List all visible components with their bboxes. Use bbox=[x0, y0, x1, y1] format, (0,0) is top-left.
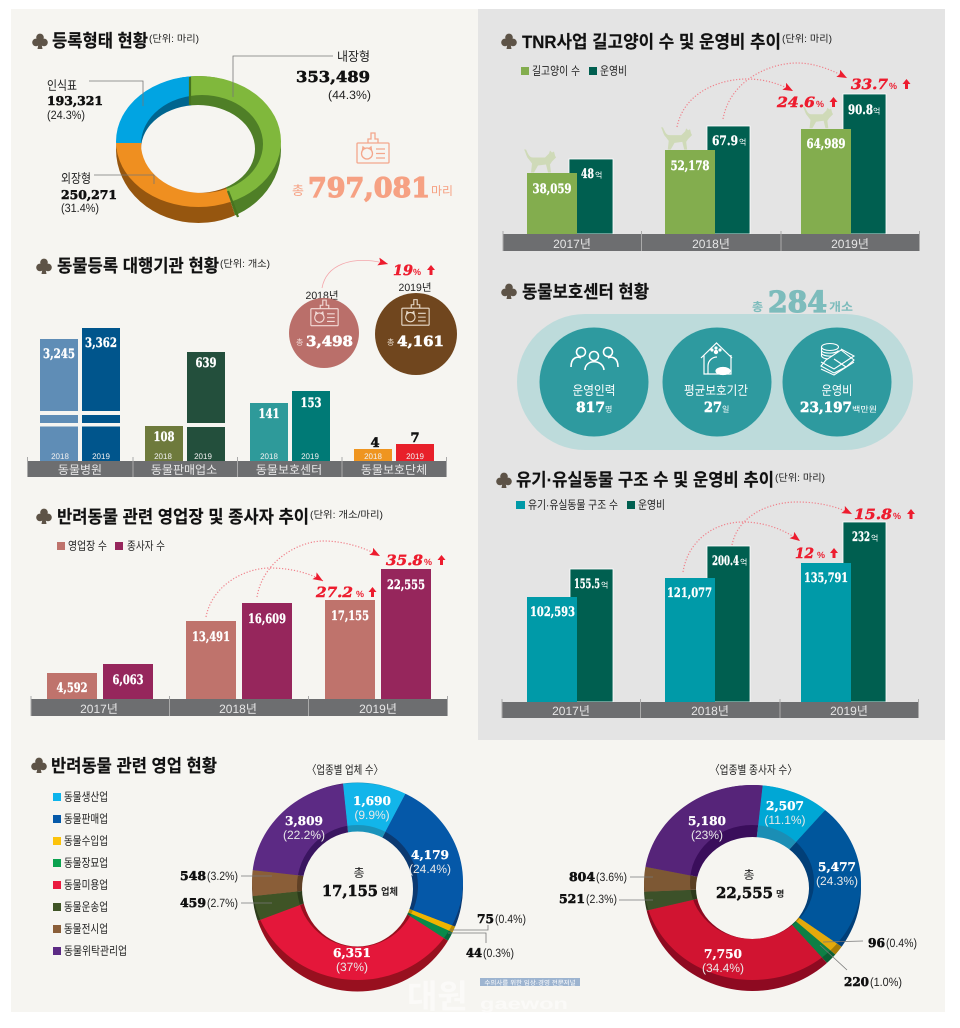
callout: exhibition businesses: 548 bbox=[180, 869, 206, 883]
callout: exhibition businesses bbox=[180, 869, 272, 883]
callout: funeral employees: 220 bbox=[844, 975, 869, 989]
stat: operating cost bbox=[782, 328, 892, 436]
circle: 2018 total: 총 bbox=[296, 338, 303, 347]
donut centre total: employees bbox=[716, 868, 784, 902]
stat: staff bbox=[540, 328, 648, 436]
growth callout 35.8% bbox=[386, 553, 446, 569]
legend: business types: 동물위탁관리업 bbox=[64, 944, 127, 958]
growth callout 33.7%: % bbox=[889, 81, 897, 91]
callout: funeral businesses: (0.3%) bbox=[483, 946, 514, 960]
label: id tag type: 193,321 bbox=[47, 94, 103, 108]
heading: business trend: (단위: 개소/마리) bbox=[310, 509, 383, 521]
bar chart: business trend bbox=[47, 569, 431, 699]
arrow: rescue growth bbox=[683, 522, 800, 572]
icon: coins and cash bbox=[821, 344, 854, 375]
legend: 유기·유실동물 구조 수 bbox=[528, 498, 618, 512]
bar group: protection organisation bbox=[354, 431, 434, 461]
callout: import businesses: (0.4%) bbox=[495, 912, 526, 926]
bar chart: rescue: 155.5 bbox=[574, 577, 600, 592]
heading: business trend: 반려동물 관련 영업장 및 종사자 추이 bbox=[57, 507, 309, 527]
callout: funeral employees bbox=[820, 945, 902, 989]
total 284 centers: 개소 bbox=[829, 300, 853, 314]
label: embedded type bbox=[233, 49, 371, 102]
donut centre total: businesses: 17,155 bbox=[322, 882, 378, 900]
heading: registration agencies: 동물등록 대행기관 현황 bbox=[57, 256, 219, 276]
circle: 2019 total: 2019년 bbox=[398, 282, 432, 294]
donut centre total: employees: 명 bbox=[776, 889, 784, 899]
growth callout 33.7% bbox=[851, 77, 910, 93]
axis: 2019년 bbox=[831, 237, 869, 251]
legend: 영업장 수 bbox=[68, 539, 107, 553]
stat: average protection period: 27 bbox=[704, 400, 722, 416]
label: external type bbox=[61, 171, 154, 215]
bar chart: rescue: 억 bbox=[601, 581, 608, 590]
circle: 2019 total: 4,161 bbox=[397, 334, 444, 350]
bar chart: TNR: 67.9 bbox=[712, 134, 738, 149]
legend: business types: 동물판매업 bbox=[64, 812, 108, 826]
growth callout 19% bbox=[393, 263, 435, 279]
callout: import employees bbox=[823, 936, 917, 950]
bar group: pet shop bbox=[145, 352, 227, 461]
bar chart: rescue: 121,077 bbox=[667, 586, 712, 601]
bar group: pet shop: 639 bbox=[196, 356, 216, 371]
donut chart: employees by type bbox=[644, 785, 861, 991]
growth callout 12% bbox=[795, 546, 838, 562]
stat: average protection period: 일 bbox=[722, 405, 729, 414]
axis: 2018년 bbox=[219, 702, 257, 716]
bar chart: TNR: 억 bbox=[595, 171, 602, 180]
donut chart: employees by type: (24.3%) bbox=[816, 874, 858, 888]
growth callout 15.8% bbox=[854, 507, 915, 523]
donut chart: businesses by type: 4,179 bbox=[411, 848, 449, 862]
axis: 2017년 bbox=[553, 237, 591, 251]
callout: funeral businesses: 44 bbox=[466, 946, 482, 960]
axis: 2017년 bbox=[80, 702, 118, 716]
donut chart: businesses by type: (9.9%) bbox=[354, 808, 390, 822]
callout: exhibition employees: 804 bbox=[569, 870, 595, 884]
icon: pet registration card bbox=[357, 133, 389, 163]
bar chart: TNR: 48 bbox=[581, 167, 594, 182]
bar group: protection center bbox=[250, 391, 330, 461]
bar chart: rescue: 200.4 bbox=[712, 554, 739, 569]
growth callout 27.2%: % bbox=[356, 589, 364, 599]
bar chart: business trend: 13,491 bbox=[192, 630, 230, 645]
bar chart: rescue: 억 bbox=[871, 534, 878, 543]
stat: staff: 명 bbox=[605, 405, 612, 414]
callout: exhibition employees bbox=[569, 870, 653, 884]
growth callout 35.8%: % bbox=[424, 557, 432, 567]
bar chart: business trend: 6,063 bbox=[112, 673, 144, 688]
arrow: employee growth bbox=[257, 541, 380, 597]
callout: transport employees bbox=[559, 892, 653, 906]
bar group: pet shop: 2019 bbox=[194, 452, 212, 461]
subtitle: businesses: 〈업종별 업체 수〉 bbox=[307, 763, 383, 777]
stat: average protection period bbox=[662, 328, 772, 436]
stat: operating cost: 23,197 bbox=[800, 400, 852, 416]
circle: 2019 total bbox=[375, 282, 457, 375]
stat: operating cost: 백만원 bbox=[852, 405, 877, 414]
callout: funeral employees: (1.0%) bbox=[870, 975, 902, 989]
panel: pet business status bbox=[31, 755, 917, 1010]
heading: rescue: 유기·유실동물 구조 수 및 운영비 추이 bbox=[516, 470, 774, 490]
bar chart: TNR: 52,178 bbox=[670, 159, 710, 174]
icon: dog house with paw bbox=[701, 343, 732, 374]
bar group: pet shop: 108 bbox=[154, 430, 174, 445]
heading: pet business status: 반려동물 관련 영업 현황 bbox=[51, 756, 217, 776]
legend: business types: 동물장묘업 bbox=[64, 856, 108, 870]
total registrations: 마리 bbox=[431, 184, 453, 198]
legend: business types: 동물미용업 bbox=[64, 878, 108, 892]
growth callout 24.6%: 24.6 bbox=[776, 95, 815, 111]
legend: 길고양이 수 bbox=[532, 64, 580, 78]
callout: funeral businesses bbox=[448, 933, 514, 960]
legend bbox=[521, 64, 627, 78]
total registrations: 797,081 bbox=[308, 173, 430, 204]
bar group: protection center: 2018 bbox=[260, 452, 278, 461]
donut centre total: businesses: 업체 bbox=[381, 886, 398, 898]
total 284 centers: 284 bbox=[768, 285, 827, 319]
label: embedded type: 353,489 bbox=[296, 68, 370, 86]
donut chart: businesses by type: 6,351 bbox=[333, 946, 371, 960]
bar group: protection organisation: 2018 bbox=[364, 452, 382, 461]
donut chart: businesses by type: 1,690 bbox=[353, 794, 391, 808]
bar chart: rescue: 232 bbox=[852, 530, 870, 545]
watermark: gaewon bbox=[480, 996, 568, 1013]
legend: business types: 동물수입업 bbox=[64, 834, 108, 848]
axis bbox=[502, 699, 919, 718]
arrow: cat count growth bbox=[677, 79, 793, 127]
bar chart: rescue: 102,593 bbox=[530, 605, 575, 620]
donut chart: registration type bbox=[116, 76, 281, 223]
donut centre total: businesses bbox=[322, 866, 398, 900]
label: embedded type: 내장형 bbox=[337, 49, 370, 64]
total 284 centers: 총 bbox=[752, 300, 763, 314]
growth callout 35.8%: 35.8 bbox=[386, 553, 423, 569]
growth callout 12%: 12 bbox=[795, 546, 814, 562]
axis: 동물병원 bbox=[58, 463, 102, 477]
donut chart: businesses by type: (37%) bbox=[336, 960, 368, 974]
donut chart: businesses by type: (24.4%) bbox=[409, 862, 451, 876]
axis: 2019년 bbox=[359, 702, 397, 716]
axis: 2018년 bbox=[692, 237, 730, 251]
bar group: animal hospital: 2019 bbox=[92, 452, 110, 461]
bar group: protection organisation: 2019 bbox=[406, 452, 424, 461]
donut chart: employees by type: 5,180 bbox=[688, 814, 726, 828]
legend: business types: 동물운송업 bbox=[64, 900, 108, 914]
callout: transport businesses: 459 bbox=[180, 896, 206, 910]
donut chart: businesses by type bbox=[252, 782, 463, 992]
donut centre total: employees: 총 bbox=[743, 868, 755, 882]
bar chart: TNR bbox=[527, 94, 886, 234]
watermark: 대원 bbox=[407, 978, 468, 1015]
callout: transport employees: 521 bbox=[559, 892, 585, 906]
panel: animal protection centers bbox=[501, 282, 913, 450]
heading: protection centers: 동물보호센터 현황 bbox=[522, 282, 649, 302]
watermark bbox=[407, 978, 580, 1015]
heading: registration type bbox=[32, 31, 199, 51]
total 284 centers bbox=[752, 285, 853, 319]
legend: business types: 동물전시업 bbox=[64, 922, 108, 936]
heading: rescue: (단위: 마리) bbox=[775, 472, 825, 484]
bar group: protection center: 153 bbox=[300, 396, 322, 411]
donut chart: businesses by type: (22.2%) bbox=[283, 828, 325, 842]
grey right column panel bbox=[478, 9, 945, 740]
callout: transport businesses bbox=[180, 896, 272, 910]
growth callout 15.8%: 15.8 bbox=[854, 507, 892, 523]
heading: registration type: 등록형태 현황 bbox=[52, 31, 148, 51]
axis: 2018년 bbox=[691, 704, 729, 718]
arrow: cost growth bbox=[732, 502, 852, 545]
stat: average protection period: 평균보호기간 bbox=[684, 383, 748, 398]
label: id tag type bbox=[47, 78, 143, 122]
axis: 동물판매업소 bbox=[151, 463, 217, 477]
growth callout 27.2%: 27.2 bbox=[315, 585, 353, 601]
bar chart: business trend: 22,555 bbox=[387, 578, 425, 593]
donut chart: employees by type: (11.1%) bbox=[764, 813, 806, 827]
callout: import businesses: 75 bbox=[477, 912, 494, 926]
label: external type: 외장형 bbox=[61, 171, 91, 186]
bar group: pet shop: 2018 bbox=[154, 452, 172, 461]
axis: 2017년 bbox=[552, 704, 590, 718]
legend: business types bbox=[53, 790, 127, 958]
bar chart: TNR: 90.8 bbox=[848, 103, 873, 118]
stat: operating cost: 운영비 bbox=[822, 383, 852, 398]
axis bbox=[31, 696, 448, 716]
label: embedded type: (44.3%) bbox=[328, 88, 371, 102]
callout: exhibition employees: (3.6%) bbox=[596, 870, 627, 884]
bar chart: business trend: 17,155 bbox=[331, 609, 369, 624]
donut chart: employees by type: 5,477 bbox=[818, 860, 856, 874]
legend: 운영비 bbox=[600, 64, 627, 78]
label: id tag type: (24.3%) bbox=[47, 108, 85, 122]
axis: 동물보호단체 bbox=[361, 463, 427, 477]
bar chart: rescue: 억 bbox=[740, 558, 747, 567]
bar group: animal hospital: 3,245 bbox=[43, 347, 75, 362]
stat: staff: 운영인력 bbox=[572, 383, 616, 398]
callout: import businesses bbox=[450, 912, 526, 930]
bar chart: TNR: 38,059 bbox=[532, 182, 572, 197]
donut chart: businesses by type: 3,809 bbox=[285, 814, 323, 828]
bar group: protection organisation: 7 bbox=[410, 431, 420, 446]
legend bbox=[57, 539, 165, 553]
growth callout 27.2% bbox=[315, 585, 376, 601]
label: external type: 250,271 bbox=[61, 188, 117, 202]
cat silhouettes bbox=[524, 107, 833, 172]
bar chart: rescue bbox=[527, 522, 886, 702]
circle: 2018 total: 2018년 bbox=[305, 290, 339, 302]
panel: business and employee trend bbox=[31, 507, 448, 716]
callout: transport businesses: (2.7%) bbox=[207, 896, 238, 910]
label: external type: (31.4%) bbox=[61, 201, 99, 215]
bar group: protection organisation: 4 bbox=[370, 436, 380, 451]
bar chart: TNR: 억 bbox=[739, 138, 746, 147]
legend: 종사자 수 bbox=[127, 539, 165, 553]
growth callout 24.6%: % bbox=[816, 99, 824, 109]
bar chart: TNR: 64,989 bbox=[806, 137, 846, 152]
bar chart: business trend: 16,609 bbox=[248, 612, 286, 627]
donut chart: employees by type: (23%) bbox=[691, 828, 723, 842]
callout: exhibition businesses: (3.2%) bbox=[207, 869, 238, 883]
legend: business types: 동물생산업 bbox=[64, 790, 108, 804]
growth callout 19%: % bbox=[413, 267, 421, 277]
stat: staff: 817 bbox=[576, 400, 605, 416]
bar group: animal hospital: 3,362 bbox=[85, 336, 117, 351]
bar chart: TNR: 억 bbox=[873, 107, 880, 116]
heading: registration type: (단위: 마리) bbox=[149, 33, 199, 45]
panel: registration type bbox=[32, 31, 453, 240]
axis bbox=[503, 231, 920, 251]
pill background bbox=[517, 314, 913, 450]
panel: registration agencies bbox=[27, 256, 457, 477]
subtitle: employees: 〈업종별 종사자 수〉 bbox=[710, 763, 797, 777]
donut centre total: businesses: 총 bbox=[353, 866, 365, 880]
axis: 2019년 bbox=[830, 704, 868, 718]
growth callout 24.6% bbox=[776, 95, 838, 111]
legend: 운영비 bbox=[638, 498, 665, 512]
icon: people bbox=[571, 348, 618, 370]
growth callout 12%: % bbox=[817, 550, 825, 560]
heading: TNR: TNR사업 길고양이 수 및 운영비 추이 bbox=[522, 32, 781, 52]
arrow: cost growth bbox=[723, 63, 847, 119]
donut chart: employees by type: 2,507 bbox=[766, 799, 804, 813]
donut chart: employees by type: (34.4%) bbox=[702, 961, 744, 975]
callout: import employees: (0.4%) bbox=[886, 936, 917, 950]
label: id tag type: 인식표 bbox=[47, 78, 77, 93]
bar chart: rescue: 135,791 bbox=[804, 571, 848, 586]
growth callout 15.8%: % bbox=[893, 511, 901, 521]
donut centre total: employees: 22,555 bbox=[716, 884, 773, 902]
circle: 2019 total: 총 bbox=[387, 338, 394, 347]
panel: TNR stray cats bbox=[501, 32, 920, 251]
bar group: protection center: 2019 bbox=[301, 452, 319, 461]
heading: TNR: (단위: 마리) bbox=[782, 33, 832, 45]
panel: stray animal rescue bbox=[496, 470, 919, 718]
bar chart: agencies bbox=[27, 328, 447, 477]
growth callout 19%: 19 bbox=[393, 263, 413, 279]
axis: 동물보호센터 bbox=[256, 463, 322, 477]
heading: registration agencies: (단위: 개소) bbox=[220, 258, 270, 270]
arrow: business growth bbox=[206, 568, 323, 617]
donut chart: employees by type: 7,750 bbox=[704, 947, 742, 961]
watermark: 수의사를 위한 임상·경영 전문저널 bbox=[484, 979, 576, 987]
axis bbox=[27, 457, 447, 477]
bar group: animal hospital bbox=[38, 328, 122, 461]
circle: 2018 total: 3,498 bbox=[306, 334, 353, 350]
callout: transport employees: (2.3%) bbox=[586, 892, 617, 906]
bar group: animal hospital: 2018 bbox=[51, 452, 69, 461]
circle: 2018 total bbox=[289, 290, 359, 368]
arrow: growth 2018 to 2019 bbox=[322, 260, 388, 288]
callout: import employees: 96 bbox=[868, 936, 885, 950]
total registrations: 총 bbox=[292, 183, 304, 198]
growth callout 33.7%: 33.7 bbox=[851, 77, 888, 93]
bar group: protection center: 141 bbox=[258, 407, 280, 422]
bar chart: business trend: 4,592 bbox=[56, 681, 88, 696]
